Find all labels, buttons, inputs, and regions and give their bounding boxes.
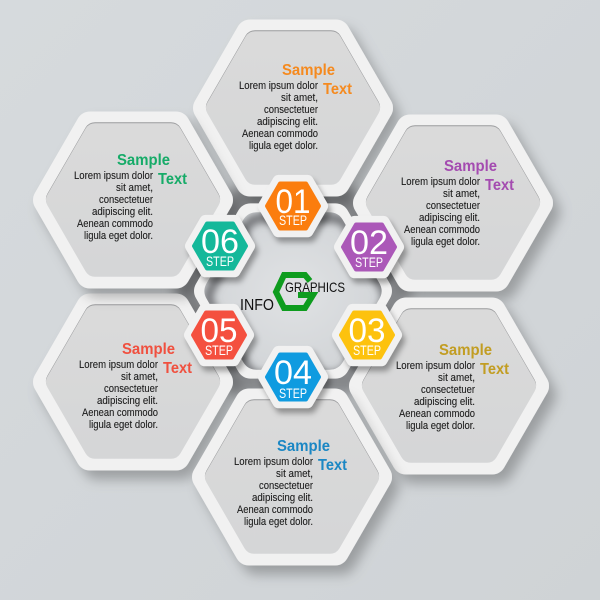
step 06 badge: [191, 221, 249, 271]
text block: lower right panel: Sample: [439, 342, 492, 359]
text block: upper right panel: Aenean commodo: [404, 224, 480, 236]
text block: upper left panel: sit amet,: [116, 182, 153, 194]
step 02 badge: [340, 222, 398, 272]
text block: bottom panel: Text: [318, 457, 347, 474]
text block: bottom panel: [234, 438, 347, 528]
step 03 badge: STEP: [353, 342, 381, 358]
text block: upper right panel: Sample: [444, 158, 497, 175]
text block: lower right panel: adipiscing elit.: [414, 396, 475, 408]
step 01 badge: STEP: [279, 212, 307, 228]
text block: top panel: Lorem ipsum dolor: [239, 80, 318, 92]
text block: upper left panel: [74, 152, 187, 242]
text block: lower left panel: sit amet,: [121, 371, 158, 383]
text block: top panel: sit amet,: [281, 92, 318, 104]
text block: top panel: ligula eget dolor.: [249, 140, 318, 152]
text block: lower right panel: Aenean commodo: [399, 408, 475, 420]
text block: upper left panel: Sample: [117, 152, 170, 169]
central ring hexagon: [204, 212, 386, 376]
step 03 badge: 03: [348, 312, 386, 350]
text block: lower left panel: Text: [163, 360, 192, 377]
step 01 badge: [264, 181, 322, 231]
text block: bottom panel: Lorem ipsum dolor: [234, 456, 313, 468]
text block: bottom panel: Aenean commodo: [237, 504, 313, 516]
text block: top panel: consectetuer: [264, 104, 318, 116]
step 06 badge: STEP: [206, 253, 234, 269]
text block: top panel: [239, 62, 352, 152]
step 05 badge: 05: [200, 312, 238, 350]
text block: upper left panel: Text: [158, 171, 187, 188]
text block: upper right panel: [401, 158, 514, 248]
text block: upper left panel: Lorem ipsum dolor: [74, 170, 153, 182]
text block: lower left panel: Lorem ipsum dolor: [79, 359, 158, 371]
text block: lower right panel: sit amet,: [438, 372, 475, 384]
text block: bottom panel: sit amet,: [276, 468, 313, 480]
text block: bottom panel: ligula eget dolor.: [244, 516, 313, 528]
text block: top panel: Sample: [282, 62, 335, 79]
text block: lower left panel: Sample: [122, 341, 175, 358]
text block: bottom panel: adipiscing elit.: [252, 492, 313, 504]
text block: upper left panel: ligula eget dolor.: [84, 230, 153, 242]
step 04 badge: STEP: [279, 385, 307, 401]
text block: lower right panel: Text: [480, 361, 509, 378]
text block: lower right panel: Lorem ipsum dolor: [396, 360, 475, 372]
step 02 badge: 02: [350, 224, 388, 262]
text block: top panel: adipiscing elit.: [257, 116, 318, 128]
center logo: G INFOGRAPHICS: [240, 275, 345, 314]
text block: top panel: Aenean commodo: [242, 128, 318, 140]
text block: upper right panel: Lorem ipsum dolor: [401, 176, 480, 188]
text block: lower left panel: ligula eget dolor.: [89, 419, 158, 431]
text block: upper left panel: Aenean commodo: [77, 218, 153, 230]
text block: lower right panel: consectetuer: [421, 384, 475, 396]
text block: lower left panel: Aenean commodo: [82, 407, 158, 419]
step 02 badge: STEP: [355, 254, 383, 270]
text block: lower right panel: ligula eget dolor.: [406, 420, 475, 432]
panel: upper right hexagon: [367, 128, 539, 278]
text block: lower left panel: consectetuer: [104, 383, 158, 395]
text block: bottom panel: consectetuer: [259, 480, 313, 492]
step 04 badge: [264, 352, 322, 402]
text block: top panel: Text: [323, 81, 352, 98]
text block: upper left panel: adipiscing elit.: [92, 206, 153, 218]
step 04 badge: 04: [274, 354, 312, 392]
panel: top hexagon: [207, 34, 379, 182]
step 03 badge: [338, 310, 396, 360]
text block: upper right panel: consectetuer: [426, 200, 480, 212]
center logo: G INFOGRAPHICS: GRAPHICS: [285, 279, 345, 295]
text block: upper left panel: consectetuer: [99, 194, 153, 206]
panel: lower right hexagon: [363, 312, 535, 460]
step 05 badge: STEP: [205, 342, 233, 358]
text block: upper right panel: Text: [485, 177, 514, 194]
text block: bottom panel: Sample: [277, 438, 330, 455]
center logo: G INFOGRAPHICS: INFO: [240, 297, 274, 314]
text block: upper right panel: adipiscing elit.: [419, 212, 480, 224]
text block: upper right panel: ligula eget dolor.: [411, 236, 480, 248]
text block: upper right panel: sit amet,: [443, 188, 480, 200]
panel: bottom hexagon: [206, 402, 378, 552]
step 01 badge: 01: [276, 183, 310, 221]
text block: lower left panel: adipiscing elit.: [97, 395, 158, 407]
panel: upper left hexagon: [47, 126, 219, 274]
step 05 badge: [190, 310, 248, 360]
step 06 badge: 06: [201, 223, 239, 261]
panel: lower left hexagon: [47, 308, 219, 456]
text block: lower left panel: [79, 341, 192, 431]
text block: lower right panel: [396, 342, 509, 432]
